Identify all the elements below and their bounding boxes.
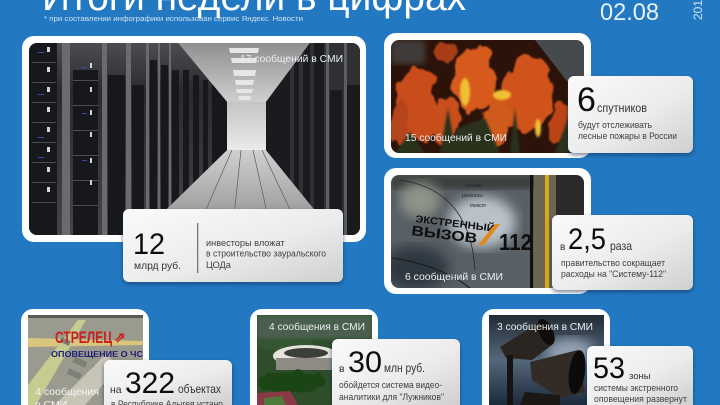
callout: 53 zones: зоны	[629, 371, 651, 382]
callout: 30 million: в	[339, 363, 345, 375]
photo: server room	[29, 43, 360, 235]
photo: emergency call poster: письмо	[465, 183, 482, 189]
logo text: ВЫЗОВ	[411, 222, 478, 246]
callout: 53 zones: 53	[593, 352, 625, 385]
logo: ОПОВЕЩЕНИЕ О ЧС	[51, 350, 143, 359]
callout: 6 satellites: лесные пожары в России	[578, 131, 677, 141]
callout: 2.5 times	[552, 215, 693, 290]
panel: Luzhniki	[250, 309, 460, 405]
callout: 322 objects	[104, 360, 232, 405]
callout: 12 billion: млрд руб.	[134, 260, 181, 272]
callout: 53 zones	[587, 346, 693, 405]
label: messages count: 3 сообщения в СМИ	[497, 321, 593, 333]
label: messages count: 15 сообщений в СМИ	[405, 132, 507, 144]
callout: 322 objects: на	[110, 384, 122, 396]
callout: 6 satellites: спутников	[597, 101, 647, 115]
logo: ⇗	[114, 329, 126, 345]
logo text	[412, 216, 530, 250]
photo: stadium	[255, 315, 372, 405]
callout: 12 billion: в строительство зауральского	[206, 248, 326, 258]
callout: 6 satellites: будут отслеживать	[578, 120, 652, 130]
callout: 2.5 times: 2,5	[568, 223, 606, 256]
photo: fire	[391, 40, 584, 153]
callout: 30 million: аналитики для "Лужников"	[339, 392, 444, 402]
logo	[51, 332, 143, 358]
label: messages count: 6 сообщений в СМИ	[405, 271, 503, 283]
source note: * при составлении инфографики использован сервис Яндекс. Новости	[44, 14, 303, 23]
label: messages count: 4 сообщения	[35, 386, 99, 398]
callout: 2.5 times: расходы на "Систему-112"	[561, 269, 666, 279]
logo text: 112	[499, 229, 532, 255]
callout: 53 zones: оповещения развернут	[594, 394, 688, 404]
photo: map	[28, 315, 143, 405]
callout: 2.5 times: правительство сокращает	[561, 258, 666, 268]
label: messages count	[35, 386, 99, 405]
photo: sirens	[489, 315, 604, 405]
callout: 322 objects: 322	[125, 367, 175, 400]
photo: emergency call poster	[381, 175, 584, 290]
panel: forest fires	[384, 33, 693, 158]
callout: 30 million: 30	[348, 346, 382, 379]
callout: 6 satellites: 6	[577, 81, 596, 119]
callout: 12 billion	[123, 209, 343, 282]
callout: 12 billion: 12	[133, 228, 165, 261]
label: messages count: 4 сообщения в СМИ	[269, 321, 365, 333]
panel: warning zones	[482, 309, 693, 405]
callout: 6 satellites	[568, 76, 693, 153]
logo: СТРЕЛЕЦ	[55, 328, 112, 347]
callout: 30 million: млн руб.	[384, 361, 425, 375]
panel: system 112	[381, 168, 693, 294]
panel: data centre	[22, 36, 366, 282]
callout: 12 billion: ЦОДа	[206, 260, 232, 270]
label: messages count: 17 сообщений в СМИ	[240, 53, 343, 65]
callout: 12 billion: инвесторы вложат	[206, 238, 285, 248]
photo: emergency call poster: текст	[470, 203, 486, 209]
photo: emergency call poster: рукопись	[461, 193, 483, 199]
callout: 322 objects: объектах	[178, 382, 221, 396]
callout: 30 million	[332, 339, 460, 405]
callout: 2.5 times: в	[560, 242, 565, 253]
logo text: ЭКСТРЕННЫЙ	[415, 212, 496, 235]
panel: Strelets	[21, 309, 232, 405]
callout: 2.5 times: раза	[610, 239, 632, 253]
callout: 30 million: обойдется система видео-	[339, 380, 442, 390]
callout: 53 zones: системы экстренного	[594, 383, 678, 393]
